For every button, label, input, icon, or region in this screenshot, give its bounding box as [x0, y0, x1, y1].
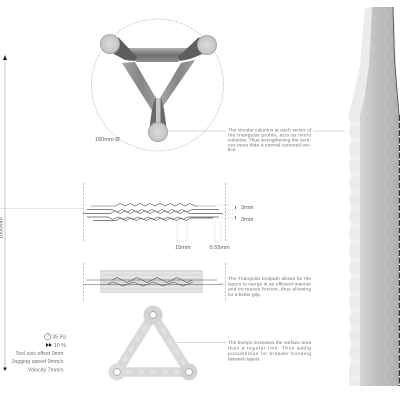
icon: gauge	[44, 334, 51, 340]
note: circular columns: ces more than a normal cornered ver-	[228, 142, 311, 147]
dimension labels: 3mm	[241, 217, 254, 223]
note: circular columns: The circular columns at each vertex of	[228, 128, 312, 132]
note: circular columns: the triangular profile, acts as micro	[228, 132, 311, 138]
note: circular columns: columns. Thus strengthening the verti-	[228, 137, 311, 142]
note: bumps: between layers.	[228, 356, 261, 362]
note: triangular toolpath	[228, 276, 311, 297]
triangular profile with columns	[100, 34, 217, 142]
dotted level line	[0, 208, 84, 210]
note: bumps: than a regular line. Thus addig	[228, 346, 311, 350]
tower elevation	[348, 7, 399, 386]
diameter label: 160mm Ø	[95, 137, 120, 143]
triangular profile plan	[108, 306, 198, 380]
print settings: Tool axis offset 0mm	[15, 351, 64, 357]
dimension labels: 15mm	[175, 245, 191, 251]
note: triangular toolpath: for a better grip.	[228, 292, 261, 297]
note: bumps: The bumps increases the surface area	[228, 340, 311, 345]
note: bumps	[228, 340, 311, 362]
dimension labels: 0.55mm	[210, 245, 230, 251]
icon: speed	[46, 343, 52, 347]
dimension labels	[175, 205, 254, 251]
note: triangular toolpath: and increases friction, thus allowing	[228, 287, 311, 292]
height dimension arrow	[3, 55, 7, 371]
dashed circle	[92, 19, 224, 151]
print settings: 10 %	[54, 343, 66, 349]
print settings: Jogging speed 0mm/s	[12, 359, 64, 365]
note: bumps: possibilities for broader bonding	[228, 351, 311, 356]
note: triangular toolpath: layers to merge in an efficient manner	[228, 281, 311, 286]
note: circular columns	[228, 128, 312, 152]
print settings: Velocity 7mm/s	[28, 368, 64, 374]
print settings: 35 Pa	[52, 335, 66, 341]
leader: bumps note	[177, 342, 226, 344]
note: triangular toolpath: The Triangular toolpath allows for the	[228, 276, 311, 281]
leader: toolpath note	[219, 283, 226, 285]
dimension labels: 3mm	[241, 205, 254, 211]
toolpath section	[83, 183, 236, 242]
note: circular columns: tice.	[228, 147, 237, 152]
print settings	[12, 334, 66, 374]
leader: column note	[167, 130, 345, 132]
layer bond section	[83, 263, 226, 302]
